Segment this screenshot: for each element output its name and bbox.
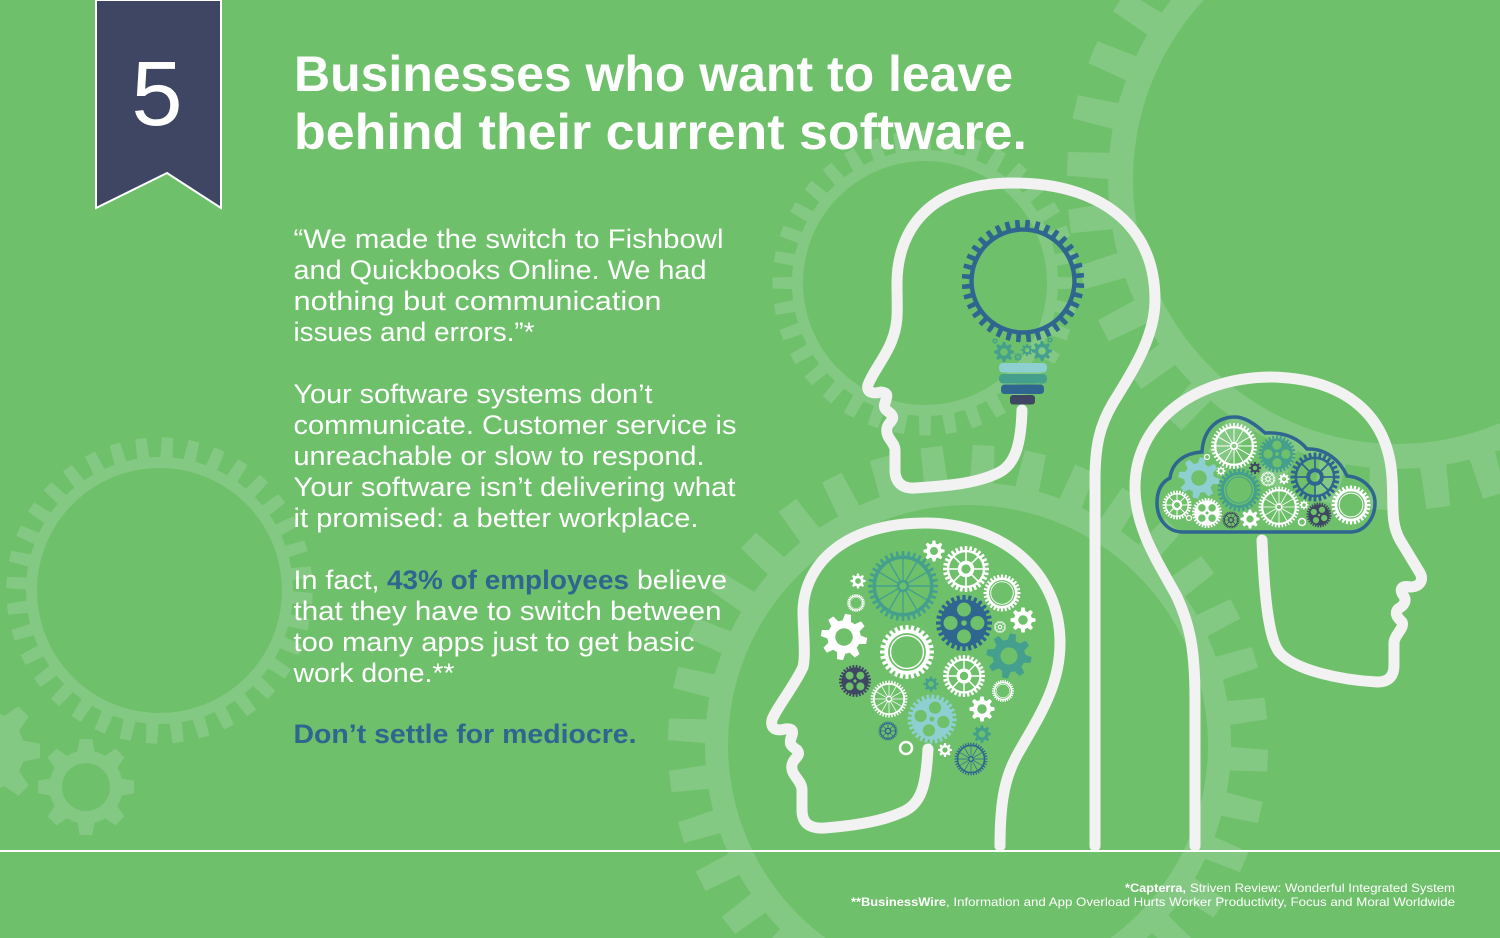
footnotes: **BusinessWire <box>851 895 946 909</box>
title: behind their current software. <box>294 104 1027 160</box>
footnotes: *Capterra, <box>1125 881 1186 895</box>
gear: top right large <box>910 0 1500 667</box>
text block: statistic: that they have to switch between <box>294 596 722 626</box>
icon: gear light bulb <box>930 188 1116 404</box>
bulb gear <box>930 188 1116 374</box>
text block: customer quote: nothing but communication <box>294 286 662 316</box>
gear: bottom left edge partial <box>0 695 40 807</box>
text block: problem description: Your software isn’t delivering what <box>294 472 736 502</box>
gear: bottom left small <box>38 739 134 835</box>
head: top with light bulb <box>868 183 1155 846</box>
text block: problem description: Your software systems don’t <box>294 379 653 409</box>
call to action: Don’t settle for mediocre. <box>294 719 636 749</box>
text block: statistic: work done.** <box>292 658 454 688</box>
head: right with cloud <box>1135 377 1422 846</box>
head outlines <box>772 183 1422 846</box>
text block: customer quote <box>294 224 724 347</box>
bulb base <box>999 363 1047 404</box>
text block: customer quote: issues and errors.”* <box>294 317 534 347</box>
text block: statistic: believe <box>637 565 727 595</box>
number 5: 5 <box>131 43 183 145</box>
ribbon badge with number 5 <box>96 0 221 208</box>
icon: gears in lower head <box>817 537 1036 782</box>
footnotes <box>851 881 1455 909</box>
title: Businesses who want to leave <box>294 46 1013 102</box>
head: lower with gears <box>772 523 1060 846</box>
text block: statistic: too many apps just to get basic <box>294 627 694 657</box>
text block: problem description: unreachable or slow to respond. <box>294 441 704 471</box>
gear: behind lower head <box>668 445 1268 938</box>
text block: problem description: communicate. Customer service is <box>294 410 736 440</box>
text block: problem description: it promised: a better workplace. <box>294 503 698 533</box>
footnotes: Striven Review: Wonderful Integrated System <box>1190 881 1455 895</box>
text block: statistic: In fact, <box>294 565 380 595</box>
cloud outline <box>1157 417 1375 532</box>
text block: problem description <box>294 379 736 533</box>
bulb small gears <box>992 337 1053 362</box>
icon: cloud of gears in right head <box>1157 414 1378 543</box>
footnotes: , Information and App Overload Hurts Worker Productivity, Focus and Moral Worldwide <box>946 895 1455 909</box>
gear: behind top head <box>710 68 1140 498</box>
text block: statistic <box>292 565 727 688</box>
text block: customer quote: “We made the switch to Fishbowl <box>294 224 724 254</box>
text block: customer quote: and Quickbooks Online. We had <box>294 255 706 285</box>
title <box>294 46 1027 160</box>
text block: statistic: 43% of employees <box>387 565 629 595</box>
footer divider line <box>0 850 1500 852</box>
gear: left large <box>0 364 386 817</box>
